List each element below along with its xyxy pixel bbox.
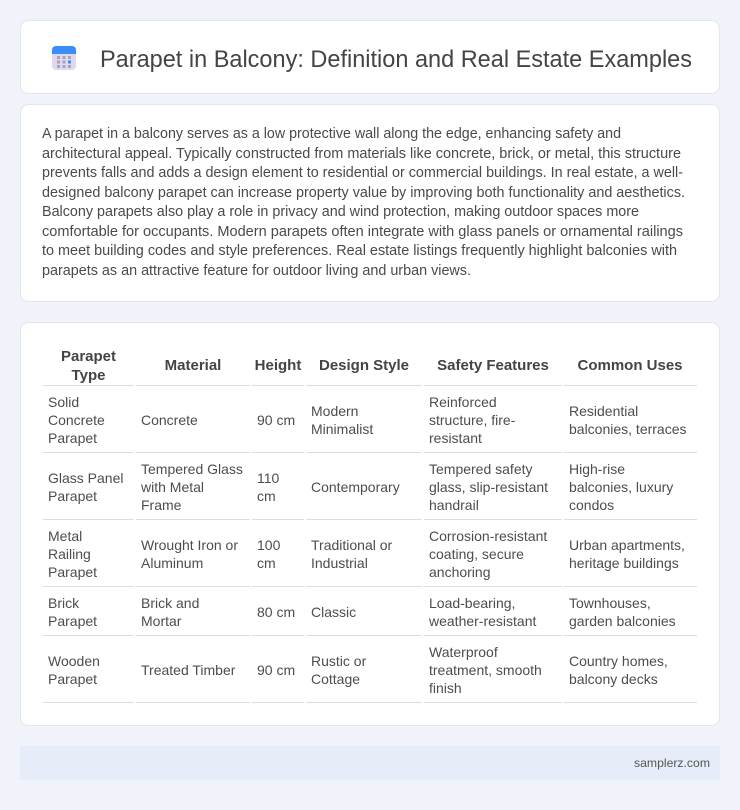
table row: glass panel parapet: condos	[569, 497, 614, 513]
panel: comparison table	[20, 322, 720, 726]
table row: wooden parapet: Country homes,	[569, 653, 668, 669]
table row: metal railing parapet: Traditional or	[311, 537, 393, 553]
text block: description paragraph: architectural appeal. Typically constructed from materials like concrete, brick, or metal, this structure	[42, 146, 681, 162]
table row: wooden parapet: Cottage	[311, 671, 360, 687]
table row: wooden parapet: Parapet	[48, 671, 97, 687]
table header row: Common Uses	[577, 357, 683, 374]
table row: glass panel parapet: Parapet	[48, 488, 97, 504]
table row: metal railing parapet: coating, secure	[429, 546, 524, 562]
footer bar	[20, 746, 720, 780]
table row: metal railing parapet: heritage buildings	[569, 555, 679, 571]
table row: brick parapet: Load-bearing,	[429, 595, 515, 611]
text block: description paragraph: comfortable for occupants. Modern parapets often integrate with glass panels or ornamental railings	[42, 224, 683, 240]
table row: metal railing parapet: Metal	[48, 528, 82, 544]
table row: solid concrete parapet: Concrete	[141, 412, 198, 428]
table row: glass panel parapet: Contemporary	[311, 479, 400, 495]
table row: wooden parapet: Wooden	[48, 653, 100, 669]
table row: solid concrete parapet: Parapet	[48, 430, 97, 446]
text block: description paragraph: Balcony parapets also play a role in privacy and wind protection, making outdoor spaces more	[42, 204, 639, 220]
table row: glass panel parapet: Tempered safety	[429, 461, 532, 477]
text block: description paragraph: designed balcony parapet can increase property value by improving both functionality and aesthetics.	[42, 185, 685, 201]
footer source text: samplerz.com	[634, 756, 710, 770]
table row: solid concrete parapet: resistant	[429, 430, 482, 446]
panel: title header	[20, 20, 720, 94]
table row: metal railing parapet: Parapet	[48, 564, 97, 580]
table row: solid concrete parapet: balconies, terraces	[569, 421, 687, 437]
table row: solid concrete parapet: Modern	[311, 403, 358, 419]
table row: solid concrete parapet	[48, 394, 687, 446]
table header row: Parapet	[61, 348, 116, 365]
table row: wooden parapet: Waterproof	[429, 644, 498, 660]
table row: solid concrete parapet: Reinforced	[429, 394, 497, 410]
table header row: Design Style	[319, 357, 409, 374]
table row: brick parapet: garden balconies	[569, 613, 676, 629]
table header row: Type	[72, 367, 105, 384]
table row: metal railing parapet: anchoring	[429, 564, 490, 580]
table row: glass panel parapet: with Metal	[140, 479, 204, 495]
icon: calendar	[52, 46, 76, 70]
table header row	[61, 348, 683, 384]
table row: glass panel parapet: glass, slip-resistant	[429, 479, 548, 495]
table row: brick parapet: Townhouses,	[569, 595, 651, 611]
table row: glass panel parapet	[48, 461, 673, 513]
table row: glass panel parapet: cm	[257, 488, 276, 504]
table row: wooden parapet: finish	[429, 680, 462, 696]
text block: description paragraph: parapets as an attractive feature for outdoor living and urban views.	[42, 263, 471, 279]
table row: metal railing parapet: Corrosion-resistant	[429, 528, 547, 544]
table row: metal railing parapet: Railing	[48, 546, 91, 562]
text block: description paragraph: to meet building codes and style preferences. Real estate listings frequently highlight balconies with	[42, 243, 677, 259]
table row: solid concrete parapet: structure, fire-	[429, 412, 516, 428]
table row: glass panel parapet: Frame	[141, 497, 182, 513]
table row: wooden parapet: Rustic or	[311, 653, 367, 669]
table row: solid concrete parapet: Concrete	[48, 412, 105, 428]
table row: wooden parapet: Treated Timber	[141, 662, 236, 678]
table header row: Material	[165, 357, 221, 374]
text block: description paragraph: prevents falls and adds a design element to residential or commercial buildings. In real estate, a well-	[42, 165, 683, 181]
table row: solid concrete parapet: 90 cm	[257, 412, 295, 428]
table row: metal railing parapet: 100	[257, 537, 281, 553]
title: Parapet in Balcony: Definition and Real Estate Examples	[100, 46, 692, 73]
table row: solid concrete parapet: Solid	[48, 394, 79, 410]
table row: solid concrete parapet: Minimalist	[311, 421, 373, 437]
table row: metal railing parapet: Industrial	[311, 555, 368, 571]
table row: wooden parapet	[48, 644, 668, 696]
table row: glass panel parapet: balconies, luxury	[569, 479, 673, 495]
table row: brick parapet: Brick	[48, 595, 80, 611]
text block: description paragraph	[42, 126, 685, 279]
table header row: Safety Features	[437, 357, 549, 374]
table row: brick parapet	[48, 595, 676, 629]
table row: brick parapet: Brick and	[141, 595, 199, 611]
table row: glass panel parapet: 110	[257, 470, 280, 486]
table row: solid concrete parapet: Residential	[569, 403, 638, 419]
table row: metal railing parapet: Wrought Iron or	[141, 537, 238, 553]
table row: brick parapet: weather-resistant	[428, 613, 536, 629]
table row: glass panel parapet: handrail	[429, 497, 479, 513]
text block: description paragraph: A parapet in a balcony serves as a low protective wall along the edge, enhancing safety and	[42, 126, 621, 142]
table row: wooden parapet: balcony decks	[569, 671, 658, 687]
table row: wooden parapet: 90 cm	[257, 662, 295, 678]
table row: brick parapet: Parapet	[48, 613, 97, 629]
table row: wooden parapet: treatment, smooth	[429, 662, 542, 678]
table row: metal railing parapet	[48, 528, 685, 580]
table row: glass panel parapet: Tempered Glass	[141, 461, 243, 477]
table row: metal railing parapet: Urban apartments,	[569, 537, 685, 553]
table row: brick parapet: Mortar	[141, 613, 182, 629]
panel: description	[20, 104, 720, 302]
table row: brick parapet: 80 cm	[257, 604, 295, 620]
table row: glass panel parapet: Glass Panel	[48, 470, 123, 486]
table header row: Height	[255, 357, 301, 374]
table row: brick parapet: Classic	[311, 604, 356, 620]
table row: metal railing parapet: cm	[257, 555, 276, 571]
table row: glass panel parapet: High-rise	[569, 461, 625, 477]
table row: metal railing parapet: Aluminum	[141, 555, 203, 571]
